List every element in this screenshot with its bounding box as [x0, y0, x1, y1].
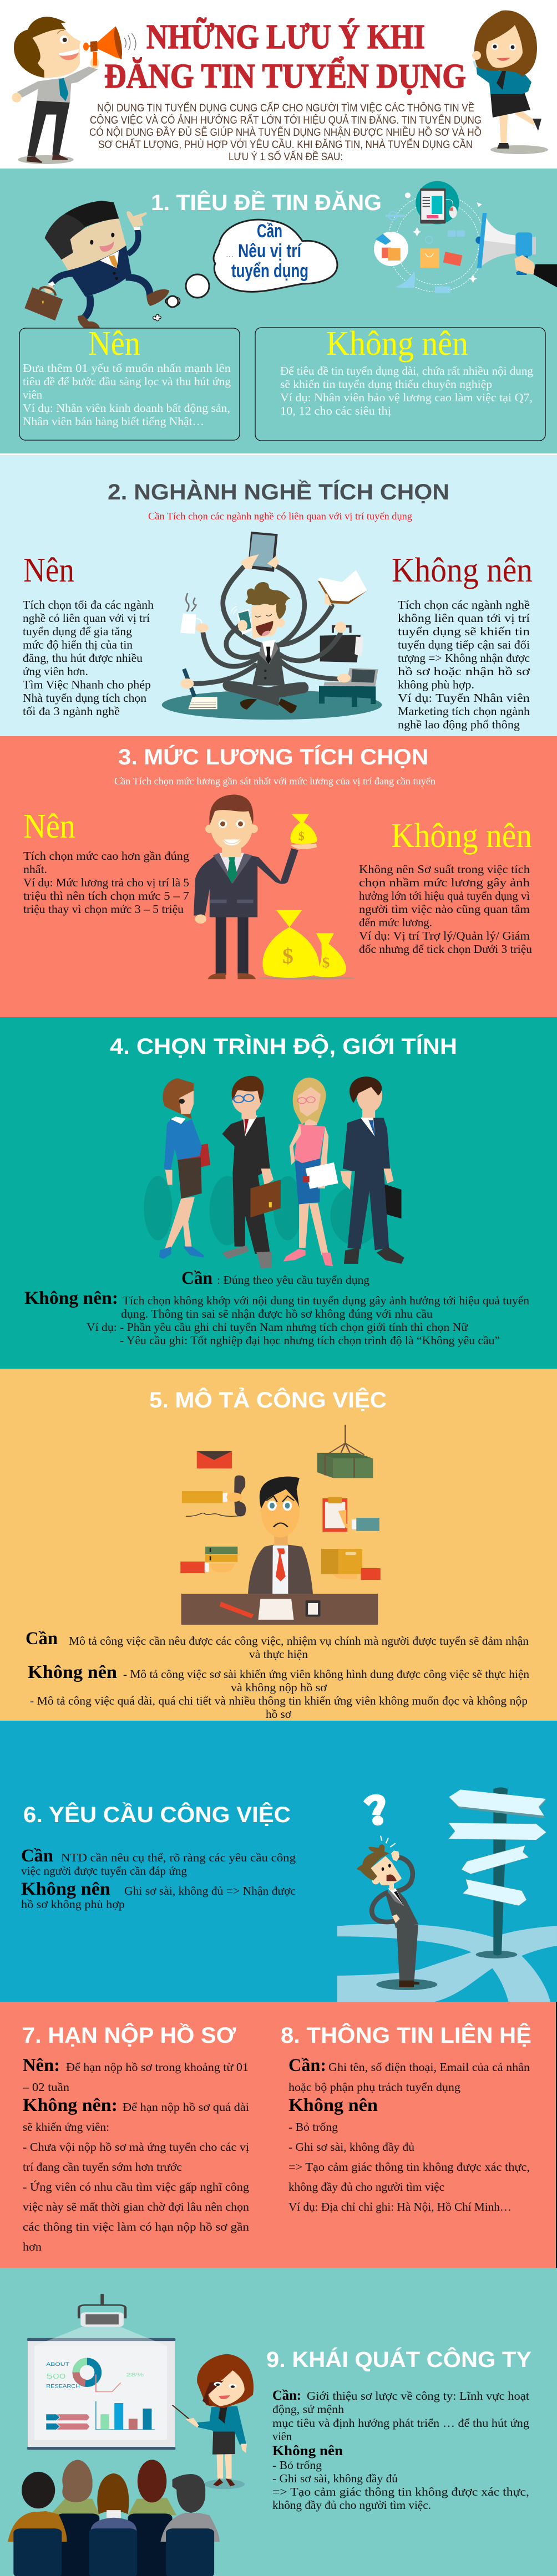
panel: header — [0, 0, 557, 169]
text block: nên: mức độ hiển thị của tin — [23, 638, 133, 651]
intro text: CÓ NỘI DUNG ĐẦY ĐỦ SẼ GIÚP NHÀ TUYỂN DỤNG NHẬN ĐƯỢC NHIỀU HỒ SƠ VÀ HỒ — [89, 126, 482, 139]
text block: nên: triệu thay vì chọn mức 3 – 5 triệu — [23, 902, 184, 916]
text block: không nên: chọn nhầm mức lương gây ảnh — [359, 876, 530, 889]
panel: hạn nộp hồ sơ: trí đang cần tuyển sớm hơn trước — [23, 2160, 182, 2174]
icon: running businessman — [24, 201, 180, 328]
text block: không nên — [24, 1288, 530, 1347]
text block: không nên: - Yêu cầu ghi: Tốt nghiệp đại học nhưng tích chọn trình độ là “Không yêu cầu” — [120, 1334, 500, 1347]
callout: speech bubble cần: Cần — [257, 221, 282, 242]
icon: confused man at crossroads — [337, 1787, 557, 2002]
panel: nên box: viên — [23, 388, 42, 401]
title: ĐĂNG TIN TUYỂN DỤNG — [104, 57, 466, 95]
presenter woman — [173, 2354, 254, 2489]
panel: hạn nộp hồ sơ: việc này sẽ mất thời gian chờ đợi lâu nên chọn — [23, 2200, 250, 2213]
man in navy suit — [340, 1077, 404, 1264]
text block: không nên: tuyển dụng tiếp cận sai đối — [398, 638, 530, 651]
callout: speech bubble cần — [167, 220, 337, 307]
heading 6: 6. YÊU CẦU CÔNG VIỆC — [23, 1802, 291, 1827]
text block: cần và không nên: động, sứ mệnh — [272, 2402, 345, 2416]
heading 3: 3. MỨC LƯƠNG TÍCH CHỌN — [118, 744, 428, 769]
icon: woman waving — [472, 11, 548, 154]
text block: cần và không nên: việc người được tuyển cần đáp ứng — [21, 1864, 187, 1878]
title: NHỮNG LƯU Ý KHI — [146, 18, 425, 56]
text block: không nên: Không nên — [392, 552, 533, 589]
text block: không nên: không phù hợp. — [398, 678, 474, 691]
heading 9: 9. KHÁI QUÁT CÔNG TY — [266, 2347, 531, 2372]
panel: không nên box: 10, 12 cho các siêu thị — [280, 404, 391, 417]
panel: nên box: Đưa thêm 01 yếu tố muốn nhấn mạnh lên — [23, 361, 231, 375]
panel: thông tin liên hệ — [281, 2022, 531, 2213]
text block: cần và không nên: - Bỏ trống — [272, 2458, 322, 2472]
projection screen: ABOUT — [46, 2361, 69, 2367]
text block: không nên: không liên quan tới vị trí — [398, 611, 530, 625]
text block: nên: ứng viên hơn. — [23, 665, 88, 678]
panel: nên box: Ví dụ: Nhân viên kinh doanh bất động sản, — [23, 401, 230, 415]
projection screen: RESEARCH — [46, 2384, 80, 2389]
text block: không nên: hồ sơ hoặc nhận hồ sơ — [398, 665, 530, 678]
panel: nên box: tiêu đề để bước đầu sàng lọc và thu hút ứng — [23, 375, 231, 388]
panel: không nên box: Ví dụ: Nhân viên bảo vệ lương cao làm việc tại Q7, — [280, 391, 533, 404]
panel: thông tin liên hệ: - Ghi sơ sài, không đầy đủ — [288, 2140, 415, 2154]
heading 4: 4. CHỌN TRÌNH ĐỘ, GIỚI TÍNH — [110, 1033, 457, 1059]
panel: thông tin liên hệ: Cần: — [288, 2055, 326, 2075]
title — [104, 18, 466, 95]
panel: không nên box: sẽ khiến tin tuyển dụng thiếu chuyên nghiệp — [280, 378, 492, 391]
text block: cần và không nên: viên — [272, 2430, 292, 2443]
text block: không nên: tượng => Không nhận được — [398, 651, 530, 665]
intro text: SƠ CHẤT LƯỢNG, PHÙ HỢP VỚI YÊU CẦU. KHI ĐĂNG TIN, NHÀ TUYỂN DỤNG CẦN — [98, 139, 473, 151]
text block: nên: Tích chọn mức cao hơn gần đúng — [23, 849, 190, 863]
text block: không nên: - Mô tả công việc sơ sài khiến ứng viên không hình dung được công việc sẽ thực hiện — [123, 1667, 530, 1681]
text block: cần và không nên: Cần: — [272, 2388, 301, 2403]
projection screen: 500 — [46, 2372, 65, 2380]
text block: không nên: đến mức lương. — [359, 916, 432, 929]
subheading 2: Cần Tích chọn các ngành nghề có liên quan với vị trí tuyển dụng — [148, 511, 412, 522]
text block: không nên: Không nên — [391, 817, 532, 855]
panel: hạn nộp hồ sơ: hơn — [23, 2240, 42, 2253]
text block: không nên: hồ sơ — [266, 1707, 292, 1721]
text block: không nên: nghề lao động phổ thông — [398, 718, 520, 731]
heading 2: 2. NGHÀNH NGHỀ TÍCH CHỌN — [108, 479, 449, 504]
text block: nên — [23, 808, 190, 916]
panel: hạn nộp hồ sơ: các thông tin việc làm có hạn nộp hồ sơ gần — [23, 2220, 250, 2233]
text block: không nên — [392, 552, 533, 731]
text block: không nên: tuyển dụng sẽ khiến tin — [398, 625, 530, 638]
text block: không nên: Không nên: — [24, 1288, 118, 1308]
text block: nên: Nên — [23, 808, 75, 845]
text block: không nên: Ví dụ: - Phần yêu cầu ghi chỉ tuyển Nam nhưng tích chọn giới tính thì chọn Nữ — [87, 1320, 468, 1334]
panel: thông tin liên hệ: 8. THÔNG TIN LIÊN HỆ — [281, 2022, 531, 2048]
text block: nên: tuyển dụng để gia tăng — [23, 625, 133, 638]
text block: nên: Tích chọn tối đa các ngành — [23, 598, 154, 611]
text block: cần: Cần — [26, 1629, 58, 1649]
text block: cần và không nên: Không nên — [21, 1879, 110, 1899]
text block: nên: nhất. — [23, 863, 47, 876]
blonde woman — [283, 1078, 338, 1266]
projection screen: 28% — [126, 2372, 144, 2378]
text block: không nên: Ví dụ: Vị trí Trợ lý/Quản lý/ Giám — [359, 929, 530, 942]
text block: cần và không nên — [272, 2388, 530, 2512]
icon: four office workers — [144, 1076, 404, 1269]
text block: cần và không nên: => Tạo cảm giác thông tin không được xác thực, — [272, 2485, 529, 2498]
text block: không nên: Ví dụ: Tuyển Nhân viên — [398, 691, 530, 705]
text block: nên — [23, 552, 154, 718]
text block: cần: và thực hiện — [249, 1647, 308, 1661]
panel: section 3 mức lương tích chọn — [0, 736, 557, 1017]
panel: section 7 and 8 — [0, 2002, 557, 2268]
audience — [8, 2460, 220, 2576]
icon: multitasking man with eight arms — [162, 532, 382, 720]
icon: businessman with money bags: $ — [322, 954, 330, 971]
intro text: CÔNG VIỆC VÀ CÓ ẢNH HƯỞNG RẤT LỚN TỚI HIỆU QUẢ TIN ĐĂNG. TIN TUYỂN DỤNG — [90, 114, 482, 126]
intro text: LƯU Ý 1 SỐ VẤN ĐỀ SAU: — [229, 151, 343, 163]
panel: thông tin liên hệ: Ghi tên, số điện thoại, Email của cá nhân — [328, 2060, 530, 2074]
panel: nên box: Nhân viên bán hàng biết tiếng Nhật… — [23, 415, 204, 428]
text block: nên: Tìm Việc Nhanh cho phép — [23, 678, 151, 691]
text block: cần và không nên: không đầy đủ cho người tìm việc. — [272, 2498, 431, 2512]
panel: hạn nộp hồ sơ: Nên: — [23, 2055, 60, 2075]
text block: cần và không nên: Ghi sơ sài, không đủ => Nhận được — [124, 1884, 296, 1897]
panel: thông tin liên hệ: không đầy đủ cho người tìm việc — [288, 2180, 444, 2194]
panel: section 2 ngành nghề tích chọn — [0, 455, 557, 736]
panel: hạn nộp hồ sơ: - Chưa vội nộp hồ sơ mà ứng tuyển cho các vị — [23, 2140, 249, 2154]
panel: section 1 tiêu đề tin đăng — [0, 169, 557, 453]
text block: không nên — [359, 817, 533, 956]
panel: section 9 khái quát công ty — [0, 2268, 557, 2576]
man with glasses — [222, 1076, 281, 1269]
panel: thông tin liên hệ: - Bỏ trống — [288, 2120, 338, 2134]
text block: cần và không nên: - Ghi sơ sài, không đầy đủ — [272, 2472, 398, 2485]
text block: nên: Ví dụ: Mức lương trả cho vị trí là 5 — [23, 876, 189, 889]
text block: cần và không nên: Giới thiệu sơ lược về công ty: Lĩnh vực hoạt — [307, 2389, 529, 2402]
panel: không nên box: Để tiêu đề tin tuyển dụng dài, chứa rất nhiều nội dung — [280, 364, 533, 378]
projection screen — [27, 2327, 175, 2450]
intro text — [89, 102, 482, 163]
text block: cần và không nên — [21, 1846, 296, 1911]
text block: không nên: đốc nhưng để tick chọn Dưới 3 triệu — [359, 942, 533, 956]
icon: businessman with money bags: $ — [282, 944, 293, 968]
panel: nên box: Nên — [88, 325, 140, 363]
text block: cần: : Đúng theo yêu cầu tuyển dụng — [217, 1273, 370, 1287]
text block: cần — [26, 1629, 529, 1661]
text block: nên: triệu thì nên tích chọn mức 5 – 7 — [23, 889, 189, 902]
panel: không nên box — [255, 325, 545, 441]
text block: nên: Nhà tuyển dụng tích chọn — [23, 691, 147, 705]
text block: nên: nghề có liên quan với vị trí — [23, 611, 150, 625]
text block: nên: đăng, thu hút được nhiều — [23, 651, 143, 665]
text block: không nên: Tích chọn không khớp với nội dung tin tuyển dụng gây ảnh hưởng tới hiệu quả tuyển — [123, 1294, 530, 1307]
text block: cần và không nên: NTD cần nêu cụ thể, rõ ràng các yêu cầu công — [61, 1851, 296, 1864]
panel: thông tin liên hệ: Không nên — [288, 2095, 378, 2115]
projector — [79, 2294, 125, 2327]
text block: nên: Nên — [23, 552, 74, 589]
text block: không nên: dụng. Thông tin sai sẽ nhận được hồ sơ không đúng với nhu cầu — [121, 1307, 433, 1320]
icon: overwhelmed office worker — [180, 1425, 381, 1625]
text block: không nên — [28, 1662, 530, 1721]
text block: cần: Mô tả công việc cần nêu được các công việc, nhiệm vụ chính mà người được tuyển sẽ đảm nhận — [69, 1634, 529, 1647]
heading 5: 5. MÔ TẢ CÔNG VIỆC — [149, 1387, 387, 1412]
icon: digital marketing megaphone — [374, 181, 557, 293]
intro text: NỘI DUNG TIN TUYỂN DỤNG CUNG CẤP CHO NGƯỜI TÌM VIỆC CÁC THÔNG TIN VỀ — [97, 102, 474, 114]
text block: cần và không nên: mục tiêu và định hướng phát triển … để thu hút ứng — [272, 2416, 530, 2430]
panel: không nên box: Không nên — [326, 325, 468, 363]
icon: businessman with money bags — [194, 794, 355, 980]
text block: không nên: Không nên — [28, 1662, 117, 1682]
text block: không nên: Marketing tích chọn ngành — [398, 705, 530, 718]
panel: hạn nộp hồ sơ: – 02 tuần — [22, 2080, 70, 2094]
icon: businessman with money bags: $ — [298, 830, 305, 843]
text block: cần: Cần — [181, 1268, 212, 1288]
panel: hạn nộp hồ sơ: sẽ khiến ứng viên: — [23, 2120, 109, 2134]
text block: cần và không nên: Cần — [21, 1846, 53, 1866]
callout: speech bubble cần: Nêu vị trí — [238, 241, 302, 262]
icon: presentation with projector and audience — [8, 2294, 254, 2576]
text block: không nên: và không nộp hồ sơ — [231, 1681, 327, 1694]
panel: thông tin liên hệ: hoặc bộ phận phụ trách tuyển dụng — [288, 2080, 461, 2094]
text block: không nên: Không nên Sơ suất trong việc tích — [359, 863, 530, 876]
text block: cần và không nên: Không nên — [272, 2444, 343, 2458]
panel: nên box — [19, 325, 240, 440]
text block: không nên: hưởng lớn tới hiệu quả tuyển dụng vì — [359, 889, 530, 902]
panel: section 4 chọn trình độ, giới tính — [0, 1017, 557, 1369]
panel: hạn nộp hồ sơ — [22, 2022, 250, 2253]
icon: man with megaphone — [12, 17, 136, 164]
text block: không nên: - Mô tả công việc quá dài, quá chi tiết và nhiều thông tin khiến ứng viên không muốn đọc và không nộp — [30, 1694, 528, 1707]
panel: hạn nộp hồ sơ: 7. HẠN NỘP HỒ SƠ — [22, 2022, 236, 2048]
text block: cần và không nên: hồ sơ không phù hợp — [21, 1897, 125, 1911]
callout: speech bubble cần: … — [226, 251, 234, 259]
text block: nên: tối đa 3 ngành nghề — [23, 705, 120, 718]
heading 1: 1. TIÊU ĐỀ TIN ĐĂNG — [151, 190, 382, 215]
text block: không nên: Tích chọn các ngành nghề — [398, 598, 530, 611]
panel: hạn nộp hồ sơ: - Ứng viên có nhu cầu tìm việc gấp nghĩ công — [23, 2180, 250, 2194]
panel: section 6 yêu cầu công việc — [0, 1721, 557, 2002]
panel: thông tin liên hệ: Ví dụ: Địa chỉ chỉ ghi: Hà Nội, Hồ Chí Minh… — [288, 2200, 512, 2213]
text block: cần — [181, 1268, 370, 1288]
callout: speech bubble cần: tuyển dụng — [231, 261, 308, 282]
panel: hạn nộp hồ sơ: Để hạn nộp hồ sơ quá dài — [123, 2100, 249, 2114]
panel: thông tin liên hệ: => Tạo cảm giác thông tin không được xác thực, — [288, 2160, 530, 2174]
panel: hạn nộp hồ sơ: Không nên: — [23, 2095, 118, 2115]
subheading 3: Cần Tích chọn mức lương gần sát nhất với mức lương của vị trí đang cần tuyển — [114, 776, 436, 787]
woman in blue — [159, 1078, 210, 1259]
panel: section 5 mô tả công việc — [0, 1369, 557, 1721]
text block: không nên: người tìm việc nào cũng quan tâm — [359, 902, 530, 916]
panel: hạn nộp hồ sơ: Để hạn nộp hồ sơ trong khoảng từ 01 — [66, 2060, 249, 2074]
